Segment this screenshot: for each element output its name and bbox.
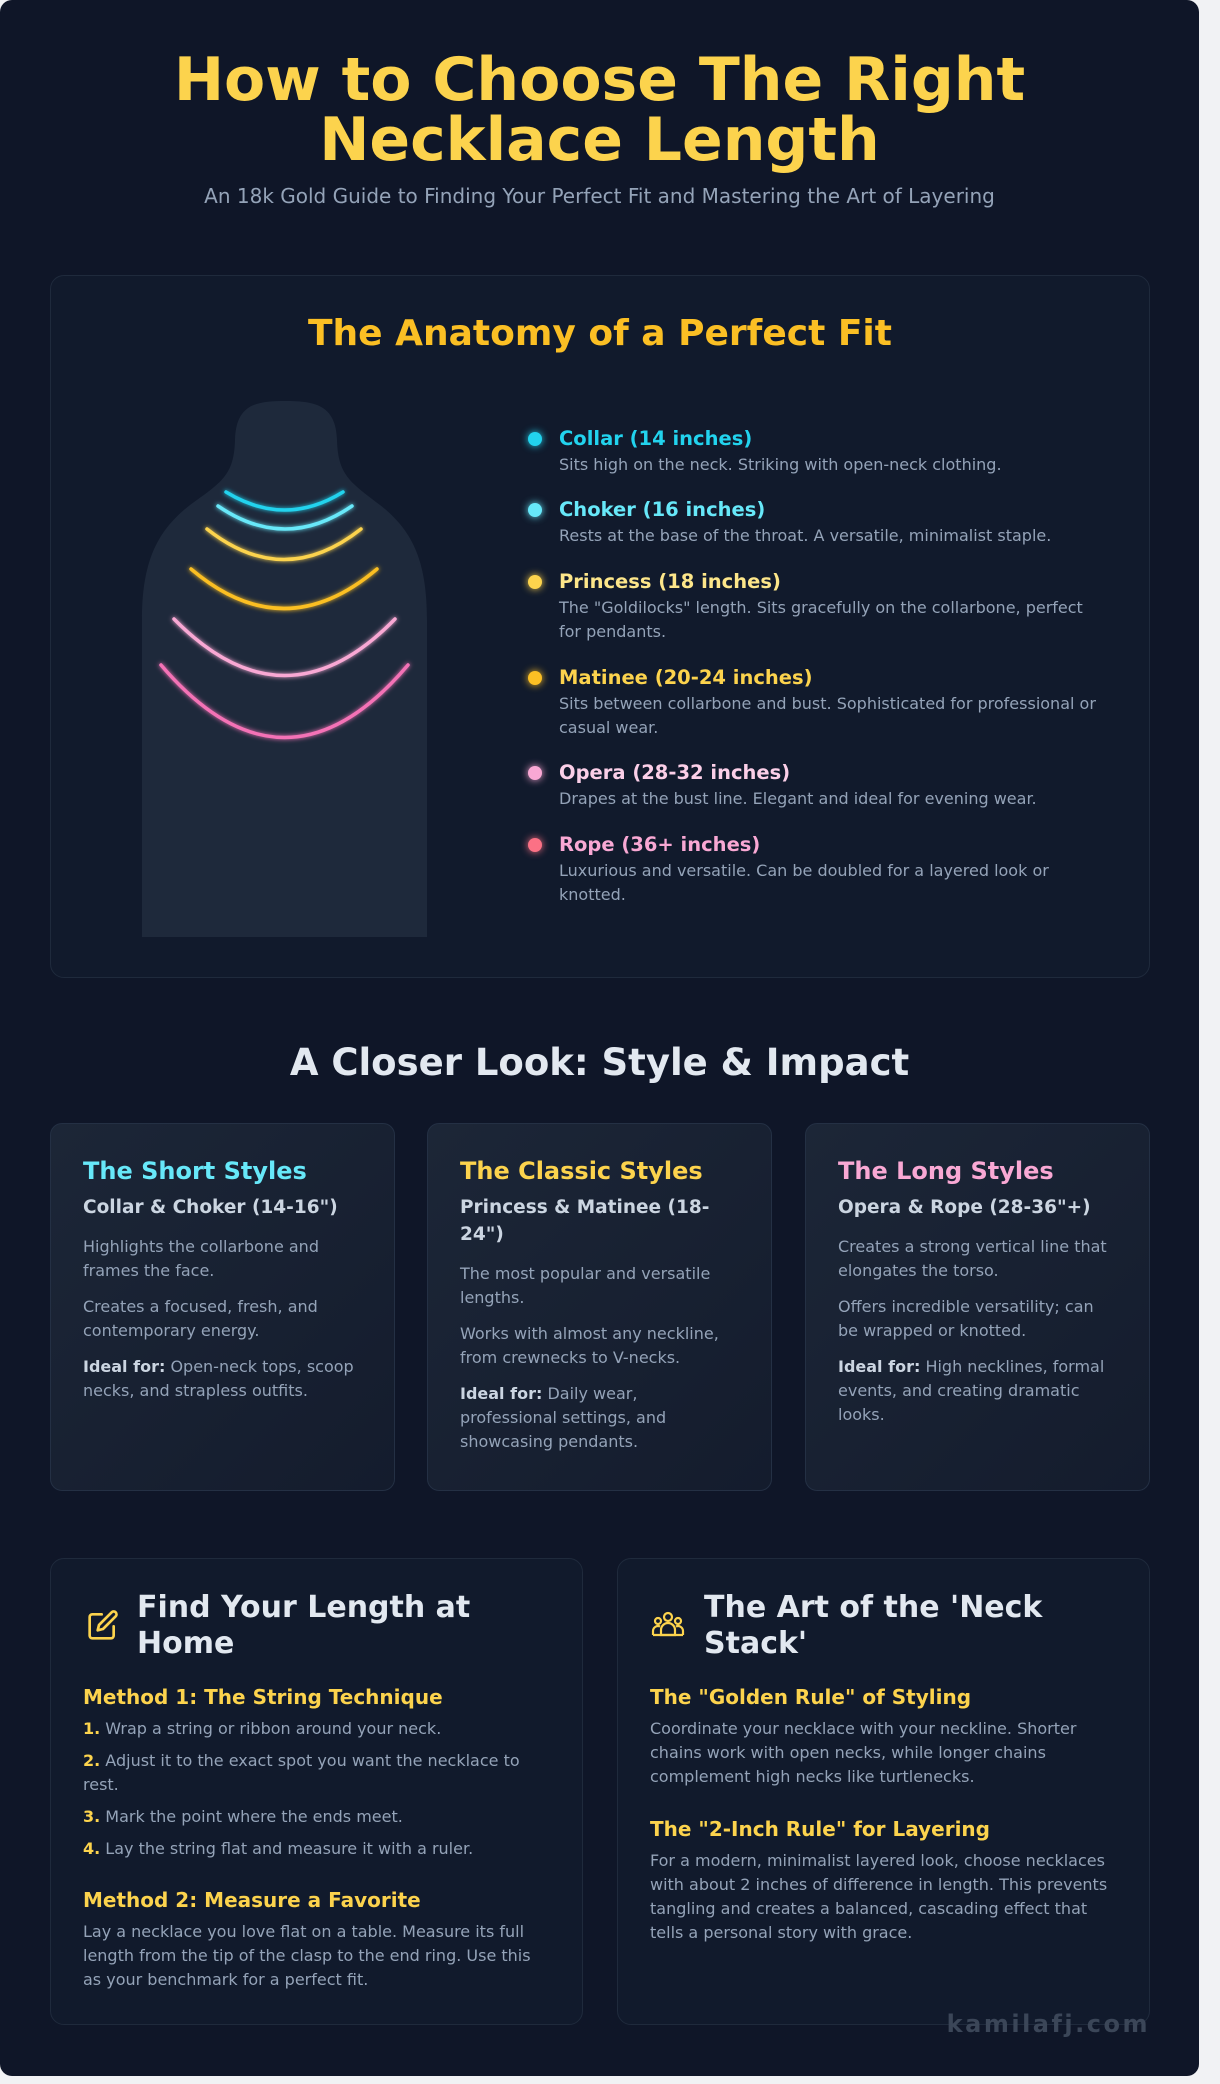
card: short styles: Highlights the collarbone and frames the face. bbox=[83, 1237, 319, 1280]
item: choker bbox=[522, 497, 1051, 545]
card: long styles: Opera & Rope (28-36"+) bbox=[838, 1197, 1091, 1218]
golden rule: The "Golden Rule" of Styling bbox=[650, 1685, 971, 1709]
item: opera bbox=[522, 760, 1037, 808]
method 1: 3. Mark the point where the ends meet. bbox=[83, 1807, 403, 1826]
item: collar: Sits high on the neck. Striking with open-neck clothing. bbox=[559, 455, 1002, 474]
method 1: 2. Adjust it to the exact spot you want the necklace to rest. bbox=[83, 1751, 520, 1794]
item: princess: Princess (18 inches) bbox=[559, 570, 781, 593]
card: short styles: Ideal for: Open-neck tops, scoop necks, and strapless outfits. bbox=[83, 1357, 354, 1400]
heading: Find Your Length at Home bbox=[137, 1590, 470, 1661]
item: collar bbox=[522, 426, 1002, 474]
card: long styles: Offers incredible versatility; can be wrapped or knotted. bbox=[838, 1297, 1094, 1340]
title: How to Choose The Right bbox=[174, 45, 1025, 115]
2-inch rule: The "2-Inch Rule" for Layering bbox=[650, 1817, 990, 1841]
golden rule bbox=[650, 1685, 1076, 1786]
method 1: 1. Wrap a string or ribbon around your neck. bbox=[83, 1719, 441, 1738]
card: classic styles: The most popular and versatile lengths. bbox=[460, 1264, 710, 1307]
card: classic styles: Princess & Matinee (18-24") bbox=[460, 1197, 709, 1245]
panel: anatomy bbox=[50, 275, 1150, 978]
card: classic styles: Works with almost any neckline, from crewnecks to V-necks. bbox=[460, 1324, 719, 1367]
subtitle: An 18k Gold Guide to Finding Your Perfect Fit and Mastering the Art of Layering bbox=[204, 184, 995, 208]
card: short styles: Creates a focused, fresh, and contemporary energy. bbox=[83, 1297, 318, 1340]
item: choker: Rests at the base of the throat. A versatile, minimalist staple. bbox=[559, 526, 1051, 545]
silhouette with necklaces bbox=[142, 401, 427, 937]
title: Necklace Length bbox=[319, 105, 880, 175]
item: opera: Opera (28-32 inches) bbox=[559, 761, 790, 784]
card: long styles: Creates a strong vertical line that elongates the torso. bbox=[838, 1237, 1107, 1280]
anatomy heading: The Anatomy of a Perfect Fit bbox=[308, 313, 892, 354]
icon: edit bbox=[88, 1610, 118, 1640]
2-inch rule: For a modern, minimalist layered look, choose necklaces with about 2 inches of difference in length. This prevents tangling and creates a balanced, cascading effect that tells a personal story with grace. bbox=[650, 1851, 1107, 1942]
item: rope: Rope (36+ inches) bbox=[559, 833, 760, 856]
method 1: Method 1: The String Technique bbox=[83, 1685, 443, 1709]
golden rule: Coordinate your necklace with your neckline. Shorter chains work with open necks, while longer chains complement high necks like turtlenecks. bbox=[650, 1719, 1076, 1786]
watermark: kamilafj.com bbox=[947, 2010, 1150, 2038]
card: long styles bbox=[805, 1123, 1150, 1491]
card: short styles: The Short Styles bbox=[83, 1157, 307, 1185]
item: choker: Choker (16 inches) bbox=[559, 498, 765, 521]
panel: neck stack bbox=[617, 1558, 1150, 2025]
card: classic styles bbox=[427, 1123, 772, 1491]
card: short styles: Collar & Choker (14-16") bbox=[83, 1197, 338, 1218]
method 2: Method 2: Measure a Favorite bbox=[83, 1888, 421, 1912]
item: rope bbox=[522, 832, 1049, 904]
item: rope: Luxurious and versatile. Can be doubled for a layered look or knotted. bbox=[559, 861, 1049, 904]
card: long styles: Ideal for: High necklines, formal events, and creating dramatic looks. bbox=[838, 1357, 1104, 1424]
heading: The Art of the 'Neck Stack' bbox=[704, 1590, 1042, 1661]
item: matinee: Sits between collarbone and bust. Sophisticated for professional or casual wear. bbox=[559, 694, 1096, 737]
method 1 bbox=[83, 1685, 520, 1858]
item: opera: Drapes at the bust line. Elegant and ideal for evening wear. bbox=[559, 789, 1037, 808]
item: matinee bbox=[522, 665, 1096, 737]
card: long styles: The Long Styles bbox=[838, 1157, 1054, 1185]
section heading: closer look: A Closer Look: Style & Impact bbox=[290, 1041, 909, 1084]
list: lengths bbox=[522, 426, 1096, 904]
item: matinee: Matinee (20-24 inches) bbox=[559, 666, 813, 689]
item: princess: The "Goldilocks" length. Sits gracefully on the collarbone, perfect for pendants. bbox=[559, 598, 1083, 641]
method 1: 4. Lay the string flat and measure it with a ruler. bbox=[83, 1839, 473, 1858]
icon: group bbox=[652, 1612, 684, 1636]
item: collar: Collar (14 inches) bbox=[559, 427, 752, 450]
item: princess bbox=[522, 569, 1083, 641]
title bbox=[174, 45, 1025, 175]
method 2: Lay a necklace you love flat on a table. Measure its full length from the tip of the clasp to the end ring. Use this as your benchmark for a perfect fit. bbox=[83, 1922, 531, 1989]
card: short styles bbox=[50, 1123, 395, 1491]
method 2 bbox=[83, 1888, 531, 1989]
panel: find your length bbox=[50, 1558, 583, 2025]
card: classic styles: Ideal for: Daily wear, professional settings, and showcasing pendants. bbox=[460, 1384, 666, 1451]
card: classic styles: The Classic Styles bbox=[460, 1157, 703, 1185]
